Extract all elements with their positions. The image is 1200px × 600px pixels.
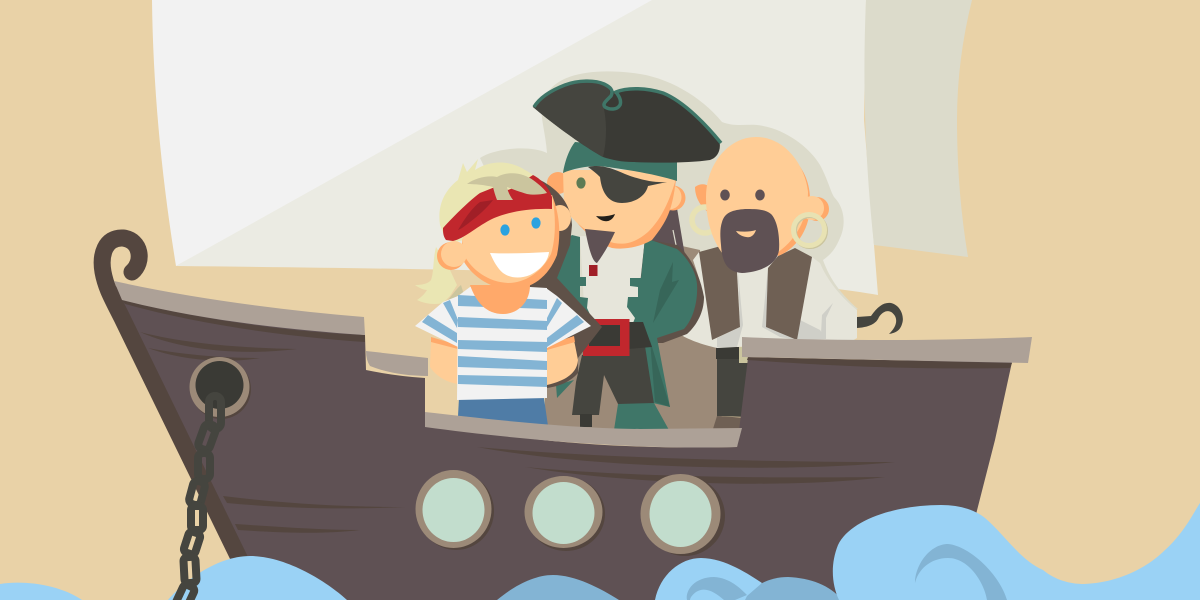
coat tail shading <box>650 340 670 407</box>
trousers <box>717 358 750 417</box>
brown outline behind boy <box>520 180 602 388</box>
eyes <box>500 217 541 236</box>
coat left <box>552 235 595 325</box>
wave swirl small <box>687 577 747 600</box>
rail right <box>742 337 1032 363</box>
porthole 1 <box>416 470 494 550</box>
rail middle <box>366 351 428 376</box>
ponytail <box>415 247 465 304</box>
shirt <box>580 236 645 322</box>
belt <box>628 322 652 349</box>
face rim <box>566 180 676 249</box>
character: captain with hat and eye patch <box>533 81 721 430</box>
belt <box>716 347 750 359</box>
wave: large right and foreground water <box>833 503 1200 600</box>
coat right <box>627 238 697 407</box>
rail front <box>114 281 365 335</box>
peg leg <box>580 414 592 427</box>
ear right <box>656 184 686 210</box>
hair highlight <box>673 230 677 250</box>
smile <box>490 252 549 277</box>
character: bald pirate with hook <box>681 137 903 432</box>
wave: left <box>168 556 347 600</box>
hull planks <box>140 332 895 533</box>
prow scroll and keel <box>102 238 240 560</box>
ear right <box>800 196 829 221</box>
arm shadow right <box>547 336 575 350</box>
ship <box>102 238 1032 600</box>
shirt shading <box>717 268 833 347</box>
boot <box>712 416 748 432</box>
wave: small dark <box>745 577 842 600</box>
belt buckle <box>583 319 630 356</box>
hat <box>533 81 721 163</box>
trousers <box>572 346 654 415</box>
left sleeve <box>415 296 458 347</box>
head rim <box>740 160 810 256</box>
wave swirl large <box>915 544 1007 600</box>
earring right <box>794 214 826 246</box>
shirt <box>681 252 857 348</box>
neck <box>470 285 530 314</box>
right sleeve <box>546 288 591 348</box>
vest right <box>766 248 812 340</box>
character: smiling boy with red bandana <box>415 159 602 426</box>
long hair <box>650 208 690 280</box>
goatee bead <box>589 265 598 276</box>
shirt stripes <box>422 295 584 387</box>
hat trim <box>534 81 721 143</box>
sail: light left panel <box>152 0 652 266</box>
right arm <box>547 340 578 385</box>
coat outline <box>600 238 704 343</box>
head rim <box>462 195 559 289</box>
rail shadow front <box>122 300 365 342</box>
face <box>563 170 676 244</box>
beard <box>720 209 779 273</box>
rail shadow right <box>747 357 1012 368</box>
headscarf <box>563 142 677 181</box>
left arm <box>430 338 458 384</box>
ear left <box>547 172 569 194</box>
hat crown right <box>533 81 720 163</box>
wave: small light <box>655 558 762 600</box>
bandana fold <box>458 200 493 230</box>
bandana <box>443 175 552 241</box>
boot <box>614 403 669 430</box>
sail <box>152 0 972 295</box>
anchor chain <box>174 396 221 600</box>
hair strand <box>467 173 547 200</box>
arm shadow left <box>431 337 458 349</box>
coat fold shading <box>653 262 679 323</box>
eye patch <box>588 166 667 203</box>
pants <box>458 398 548 426</box>
goatee <box>585 229 615 263</box>
wave: mid dark <box>497 575 619 600</box>
belt buckle <box>739 347 748 363</box>
porthole 2 <box>524 476 605 551</box>
hull <box>112 285 1012 600</box>
eyes <box>720 190 765 200</box>
shirt <box>457 287 547 400</box>
smile <box>596 214 615 221</box>
sail: centre panel <box>176 0 878 295</box>
mouth <box>736 230 756 237</box>
hair <box>439 159 548 242</box>
head <box>462 195 555 283</box>
left ear <box>437 241 467 270</box>
hat left fold <box>533 81 610 157</box>
earring left <box>692 207 718 233</box>
deck backdrop <box>545 240 722 432</box>
hook <box>857 303 903 334</box>
eye <box>576 177 586 189</box>
deck front <box>425 412 742 448</box>
ear left <box>695 184 708 212</box>
coat tail left <box>556 380 574 398</box>
sail: shaded right panel <box>864 0 972 257</box>
right ear <box>549 205 571 231</box>
head <box>706 137 808 262</box>
hawse hole with chain anchor ring <box>190 357 251 419</box>
vest left <box>699 246 740 340</box>
halo behind characters <box>480 71 858 345</box>
wave: far left <box>0 583 82 600</box>
porthole 3 <box>640 474 725 556</box>
